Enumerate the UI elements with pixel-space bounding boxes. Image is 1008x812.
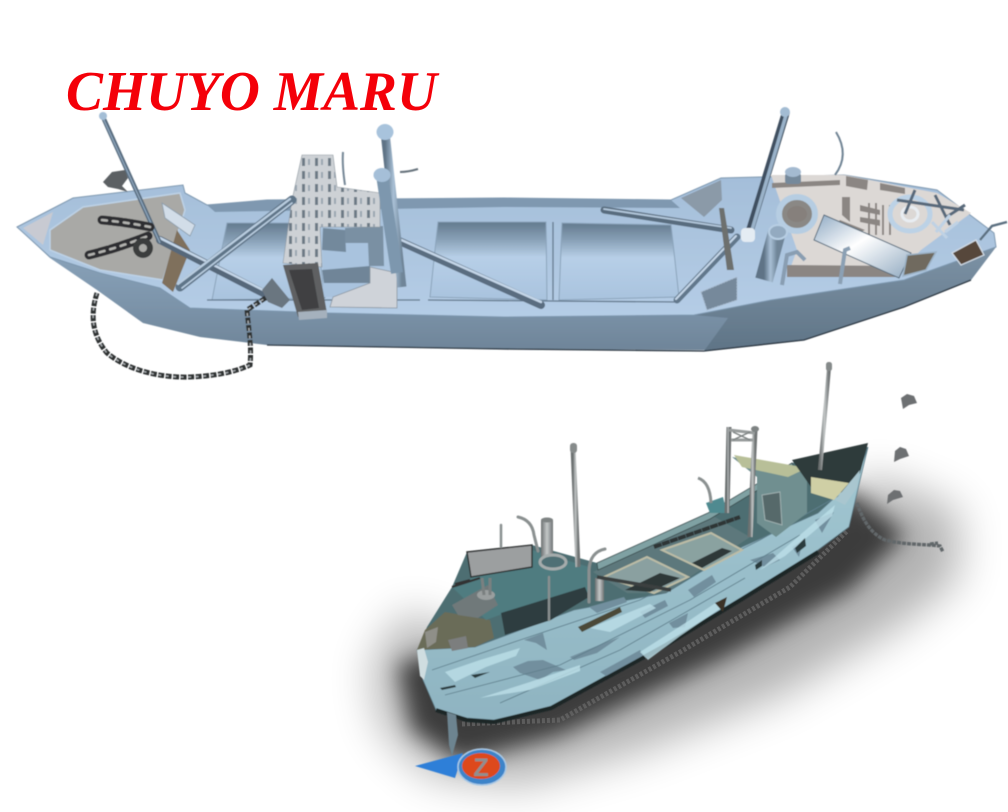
hull plank lines (432, 495, 840, 703)
winch at boom end (262, 278, 290, 308)
drum on deck (467, 545, 532, 577)
funnel (541, 518, 553, 557)
bridge windows (762, 492, 782, 525)
compass: Z (473, 754, 489, 782)
deck anchor chains (89, 220, 150, 255)
ship underlay (417, 447, 868, 650)
bridge roof (734, 455, 807, 477)
forecastle light box (811, 477, 849, 500)
bow plate (23, 212, 53, 245)
top ship: clean hull model (17, 107, 1007, 377)
sea floor shadow (372, 478, 958, 785)
main deck (17, 175, 996, 317)
compass (415, 749, 506, 785)
after cylinder (595, 578, 604, 601)
hatch rails (207, 222, 678, 302)
large cylinder (814, 215, 911, 278)
middle hatch (430, 222, 547, 300)
mushroom vent (785, 167, 801, 184)
forecastle (792, 443, 868, 493)
aft well ladder (701, 277, 737, 310)
midship light platform (330, 267, 397, 308)
after vents and posts (501, 517, 605, 620)
ladder structure (283, 155, 380, 267)
midship dark box (283, 263, 327, 320)
bottom ship: wreck scan with shadow (372, 362, 958, 785)
rear hatch (604, 557, 688, 593)
hatch shadows (625, 548, 732, 592)
winch ring (890, 190, 965, 238)
poop stanchions and pipes (764, 132, 850, 285)
title: CHUYO MARU (66, 61, 440, 123)
platform (706, 497, 727, 513)
cargo booms (160, 199, 737, 305)
bow chain (857, 503, 943, 552)
forecastle door (162, 230, 190, 292)
aft hatch (559, 223, 679, 300)
stern dome (417, 612, 494, 680)
poop floor (771, 175, 971, 277)
stern brown box (952, 222, 1007, 265)
forward goalpost (727, 426, 759, 537)
rudder (447, 712, 458, 756)
after cabin windows (501, 587, 589, 635)
keel line (436, 552, 818, 722)
after deck top (452, 550, 589, 620)
front hatch (662, 533, 742, 570)
forward deck rail (835, 470, 860, 505)
bridge block (732, 457, 807, 537)
deck machinery (452, 578, 498, 618)
anchor fragments (887, 394, 917, 504)
forward mast (99, 112, 160, 243)
hull side (17, 227, 996, 351)
after mast (570, 443, 578, 567)
well deck (593, 513, 750, 593)
aft mast (741, 107, 790, 242)
ring vent (540, 555, 566, 569)
forward mast (820, 362, 832, 470)
rust and dark hull gashes (440, 538, 806, 690)
poop bulkhead strip (719, 208, 734, 270)
poop deck detail lines (772, 176, 905, 277)
forward vent (698, 478, 711, 503)
wreck hull (417, 447, 868, 720)
anchor winch (103, 170, 128, 192)
far bulwark (597, 463, 794, 570)
forecastle bracket (162, 203, 195, 236)
wreck booms (597, 517, 740, 590)
midship superstructure blocks (322, 226, 385, 297)
hull paint patches: pale (445, 505, 835, 698)
hull paint patches: dark (513, 512, 834, 680)
hanging anchor chain (93, 293, 267, 377)
midship masts (343, 124, 418, 287)
forecastle floor (50, 193, 185, 280)
far bulwark (207, 198, 680, 212)
ring fitting (779, 197, 815, 231)
poop grid wall (681, 180, 722, 217)
cylinder cradle (903, 252, 936, 276)
forward hatch (212, 223, 325, 300)
